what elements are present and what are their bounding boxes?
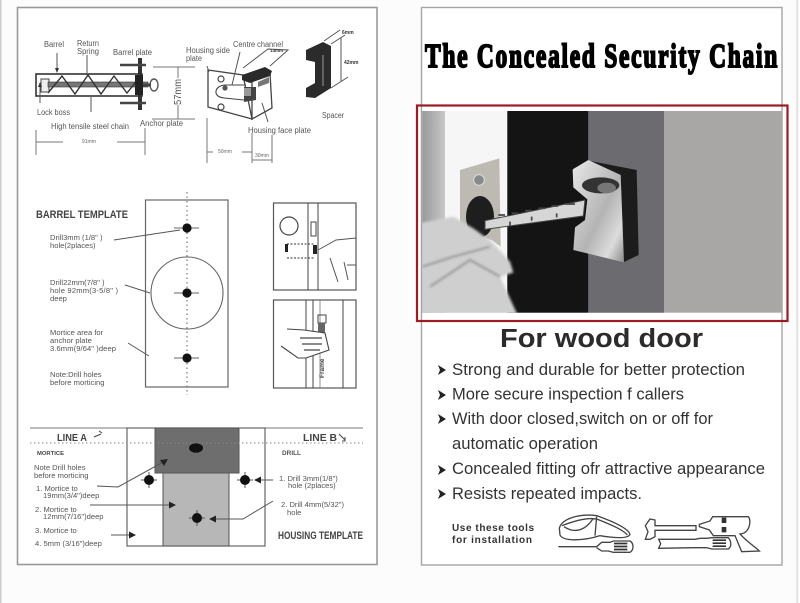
bullet 3 bbox=[438, 410, 713, 453]
bullet 3: automatic operation bbox=[452, 435, 598, 453]
diagram: housing template: 19mm(3/4")deep bbox=[43, 491, 99, 500]
heading: barrel template: BARREL TEMPLATE bbox=[36, 209, 128, 221]
diagram: barrel template: Mortice area for bbox=[50, 328, 104, 337]
diagram: housing template bbox=[30, 428, 363, 548]
diagram: barrel template: anchor plate bbox=[50, 336, 92, 345]
diagram: barrel template: Note:Drill holes bbox=[50, 370, 102, 379]
diagram: housing: Housing side bbox=[186, 46, 231, 55]
highlight frame bbox=[417, 106, 788, 321]
heading: for wood door: For wood door bbox=[500, 325, 703, 353]
diagram: housing template: DRILL bbox=[282, 451, 301, 457]
diagram: barrel cross-section: Spring bbox=[77, 47, 99, 56]
diagram: housing: 14mm bbox=[270, 48, 283, 53]
bullet 1: Strong and durable for better protection bbox=[452, 361, 745, 379]
icon: electric drill bbox=[699, 517, 759, 552]
diagram: housing template: 12mm(7/16")deep bbox=[43, 512, 104, 521]
diagram: housing template: hole (2places) bbox=[288, 481, 336, 490]
diagram: housing template: 3. Mortice to bbox=[35, 526, 77, 535]
bullet 3: With door closed,switch on or off for bbox=[452, 410, 713, 428]
diagram: barrel template bbox=[36, 192, 228, 395]
diagram: housing: Housing face plate bbox=[248, 126, 312, 135]
diagram: spacer: Spacer bbox=[322, 111, 344, 120]
diagram: barrel cross-section: Barrel plate bbox=[113, 48, 153, 57]
diagram: barrel cross-section bbox=[36, 39, 195, 155]
diagram: barrel template: hole(2places) bbox=[50, 241, 96, 250]
illustration: fitting the chain in the frame: Frame bbox=[319, 358, 326, 378]
diagram: barrel cross-section: Anchor plate bbox=[140, 119, 184, 128]
photo: hand operating chain bbox=[417, 111, 782, 317]
bullet 5: Resists repeated impacts. bbox=[452, 485, 642, 503]
diagram: barrel template: hole 92mm(3-5/8" ) bbox=[50, 286, 118, 295]
heading: line B: LINE B bbox=[303, 433, 337, 444]
diagram: housing template: 1. Mortice to bbox=[36, 484, 78, 493]
diagram: spacer bbox=[306, 30, 359, 120]
panel: installation diagrams bbox=[18, 8, 377, 564]
diagram: housing: 50mm bbox=[218, 149, 232, 155]
icon: screwdriver bbox=[558, 541, 633, 552]
diagram: barrel template: 3.6mm(9/64" )deep bbox=[50, 344, 116, 353]
diagram: spacer: 42mm bbox=[344, 60, 359, 66]
diagram: barrel cross-section: Barrel bbox=[44, 40, 64, 49]
diagram: barrel template: deep bbox=[50, 294, 67, 303]
heading: line A: LINE A bbox=[57, 433, 87, 444]
panel: product information bbox=[417, 8, 788, 565]
icon: hammer bbox=[645, 519, 696, 539]
bullet 4: Concealed fitting ofr attractive appearance bbox=[452, 460, 765, 478]
diagram: barrel cross-section: 57mm bbox=[173, 79, 184, 105]
diagram: housing template: 2. Mortice to bbox=[35, 505, 77, 514]
diagram: barrel template: before morticing bbox=[50, 378, 104, 387]
diagram: barrel template: Drill22mm(7/8" ) bbox=[50, 278, 105, 287]
diagram: housing: plate bbox=[186, 54, 202, 63]
diagram: housing template: before morticing bbox=[34, 471, 88, 480]
diagram: housing template: Note Drill holes bbox=[34, 463, 86, 472]
icons: installation tools bbox=[558, 515, 759, 552]
bullet 2: More secure inspection f callers bbox=[452, 386, 684, 404]
diagram: housing: Centre channel bbox=[233, 40, 283, 49]
feature list bbox=[438, 361, 765, 503]
diagram: housing bbox=[186, 40, 312, 163]
diagram: barrel cross-section: High tensile steel chain bbox=[51, 122, 129, 131]
diagram: housing template: 4. 5mm (3/16")deep bbox=[35, 539, 102, 548]
illustration: drilling the door edge bbox=[274, 203, 356, 290]
illustration: fitting the chain in the frame bbox=[274, 300, 356, 388]
diagram: spacer: 6mm bbox=[342, 30, 354, 36]
diagram: housing template: 2. Drill 4mm(5/32") bbox=[281, 500, 345, 509]
icon: safety goggles bbox=[559, 515, 630, 540]
tools caption bbox=[452, 523, 534, 546]
diagram: barrel cross-section: 91mm bbox=[82, 139, 96, 145]
diagram: barrel cross-section: Lock boss bbox=[37, 108, 70, 117]
diagram: housing template: MORTICE bbox=[37, 451, 64, 457]
diagram: barrel template: Drill3mm (1/8" ) bbox=[50, 233, 103, 242]
tools caption: Use these tools bbox=[452, 523, 534, 534]
tools caption: for installation bbox=[452, 535, 532, 546]
heading: housing template: HOUSING TEMPLATE bbox=[278, 530, 363, 542]
icon: chisel bbox=[659, 538, 731, 549]
diagram: housing template: hole bbox=[287, 508, 301, 517]
diagram: housing: 30mm bbox=[255, 153, 269, 159]
diagram: barrel cross-section: Return bbox=[77, 39, 99, 48]
diagram: housing template: 1. Drill 3mm(1/8") bbox=[279, 474, 338, 483]
